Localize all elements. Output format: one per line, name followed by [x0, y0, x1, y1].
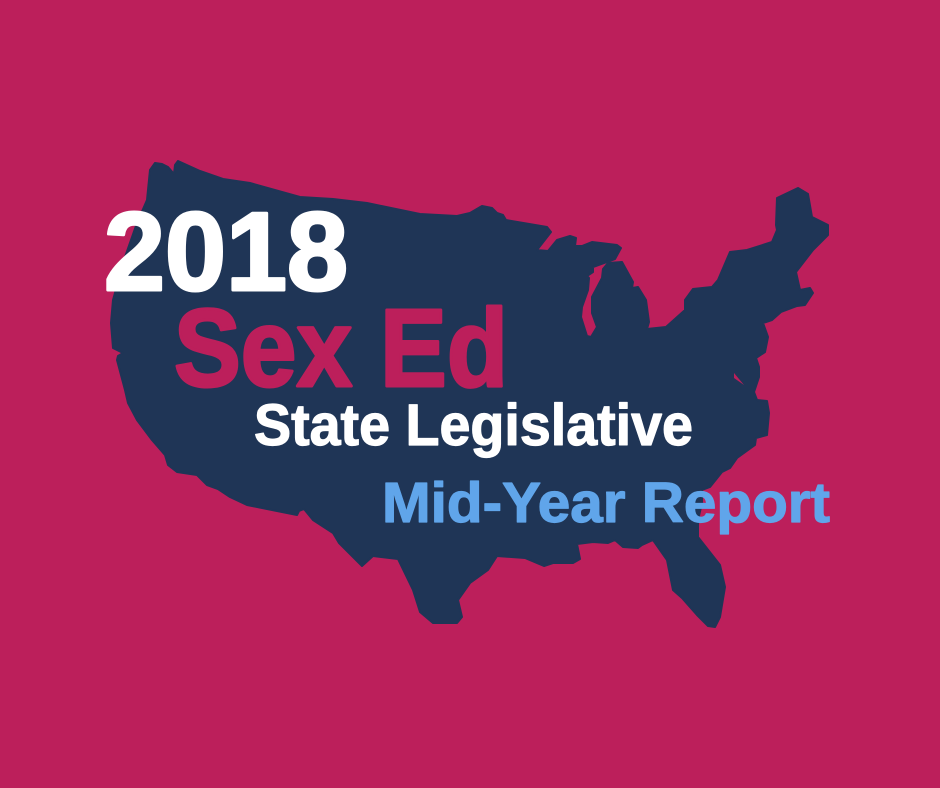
subheading: State Legislative: State Legislative — [254, 393, 693, 458]
title: 2018: 2018 — [104, 190, 348, 314]
map: United States silhouette — [111, 161, 828, 627]
subheading: Mid-Year Report: Mid-Year Report — [382, 471, 830, 535]
map: Chesapeake Bay inlet — [734, 373, 744, 385]
heading: Sex Ed: Sex Ed — [174, 287, 508, 410]
